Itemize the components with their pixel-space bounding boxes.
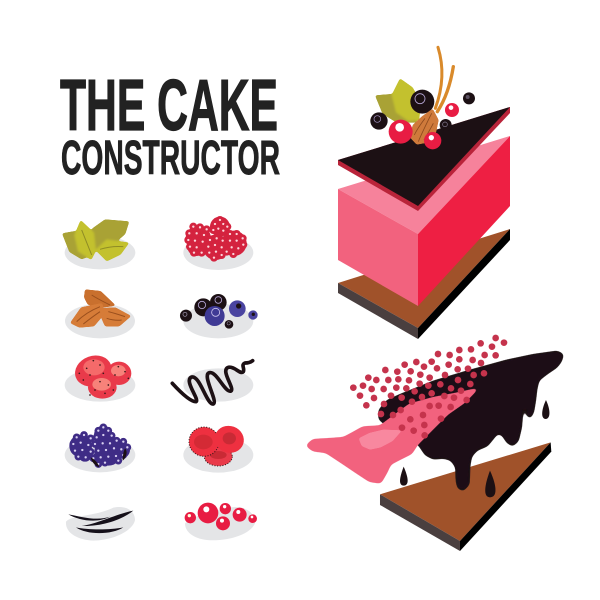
item: almonds [65,289,135,338]
pink sauce [305,387,480,484]
chocolate glaze layer [338,107,510,211]
icon: dark berries [370,90,475,131]
item: blackberries [65,423,135,472]
glaze drips [400,400,549,497]
toppings [370,47,475,149]
item: red currants [185,503,257,540]
exploded ingredients: glaze, sauce and sponge [305,335,564,551]
title [60,66,280,185]
chocolate glaze [378,351,564,491]
item: mint leaves [62,219,135,269]
red dots sprinkle [350,335,507,439]
icon: almond [410,109,439,145]
item: strawberry slices [183,422,253,473]
item: strawberries [65,351,135,402]
ingredients bottom rows [65,351,257,541]
assembled cake slice [338,47,510,339]
heading: the cake: THE CAKE [60,66,278,146]
item: vanilla pods [66,507,135,541]
heading: constructor: CONSTRUCTOR [61,132,280,185]
item: chocolate squiggle [172,361,253,404]
ingredients top rows [62,216,258,338]
bottom sponge layer [338,229,510,339]
item: raspberries [183,216,253,270]
pink mousse block [338,136,510,306]
icon: vanilla sticks [435,47,453,112]
sponge base [380,442,551,551]
icon: leaves [375,78,421,123]
item: blueberries [180,294,258,338]
icon: red berries [389,103,459,149]
